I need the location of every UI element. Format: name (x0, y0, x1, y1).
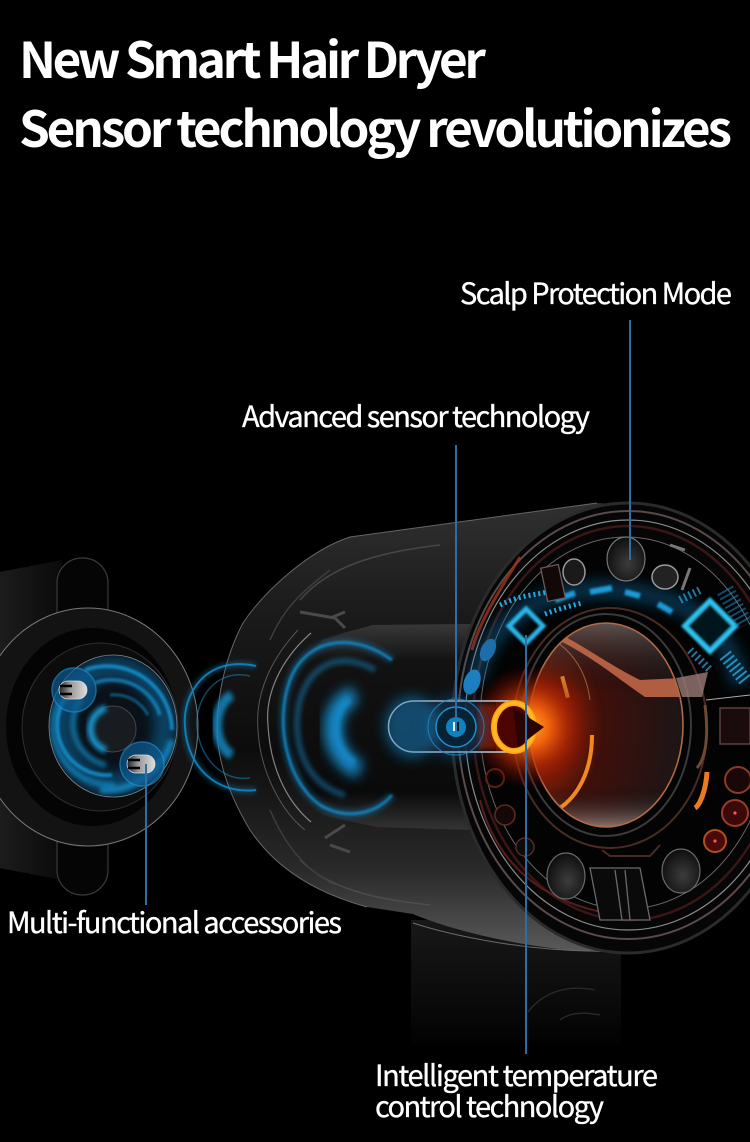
inner cylinder (294, 624, 470, 830)
label: scalp protection mode: Scalp Protection Mode (460, 271, 732, 313)
central lens (529, 623, 708, 827)
lower pin (120, 742, 164, 786)
sensor button (446, 717, 466, 737)
upper pin (52, 668, 96, 712)
lower knobs (486, 769, 700, 899)
inner housing ring (513, 608, 707, 848)
callout line: scalp protection (629, 320, 631, 560)
blue airflow rings between nozzle and body (185, 664, 256, 791)
dryer handle (411, 920, 621, 1045)
label: multi-functional accessories: Multi-functional accessories (7, 900, 342, 942)
nozzle outer ring (0, 608, 198, 846)
sensor capsule with orange heat glow (384, 665, 592, 789)
dryer body shell (217, 503, 628, 952)
title (19, 22, 732, 162)
callout line: temperature (525, 635, 527, 1054)
callout line: accessories (145, 764, 147, 905)
blue airflow rings inside body (283, 643, 392, 814)
orange ring (494, 703, 534, 751)
dryer front ring (452, 503, 750, 953)
callout line: sensor (455, 445, 457, 717)
right side knobs (704, 767, 750, 852)
upper mounting tab (57, 558, 108, 638)
label: advanced sensor technology: Advanced sensor technology (242, 394, 590, 436)
label: intelligent temperature control technology: Intelligent temperature (375, 1053, 658, 1095)
accessory nozzle (0, 558, 198, 895)
orange heat glow (468, 665, 592, 789)
accessory body stub (0, 560, 62, 880)
shell highlight bands (300, 545, 440, 905)
inner white arcs (268, 633, 311, 822)
cone tip (513, 708, 544, 747)
sensor rings (423, 694, 489, 760)
title: Sensor technology revolutionizes (19, 91, 732, 162)
blue glow behind capsule tip (384, 695, 440, 759)
vent teeth (300, 612, 350, 852)
right side vents (695, 695, 750, 808)
title: New Smart Hair Dryer (19, 22, 486, 93)
capsule (388, 701, 510, 752)
shell outline (217, 503, 597, 907)
blue circuit band (460, 588, 745, 697)
bottom bracket (590, 845, 660, 920)
nozzle inner disc with blue airflow (49, 655, 177, 797)
upper knobs (541, 537, 690, 601)
center hub (90, 706, 136, 752)
label: intelligent temperature control technology: control technology (375, 1084, 604, 1126)
label: intelligent temperature control technology (375, 1053, 658, 1126)
lower mounting tab (57, 815, 108, 895)
